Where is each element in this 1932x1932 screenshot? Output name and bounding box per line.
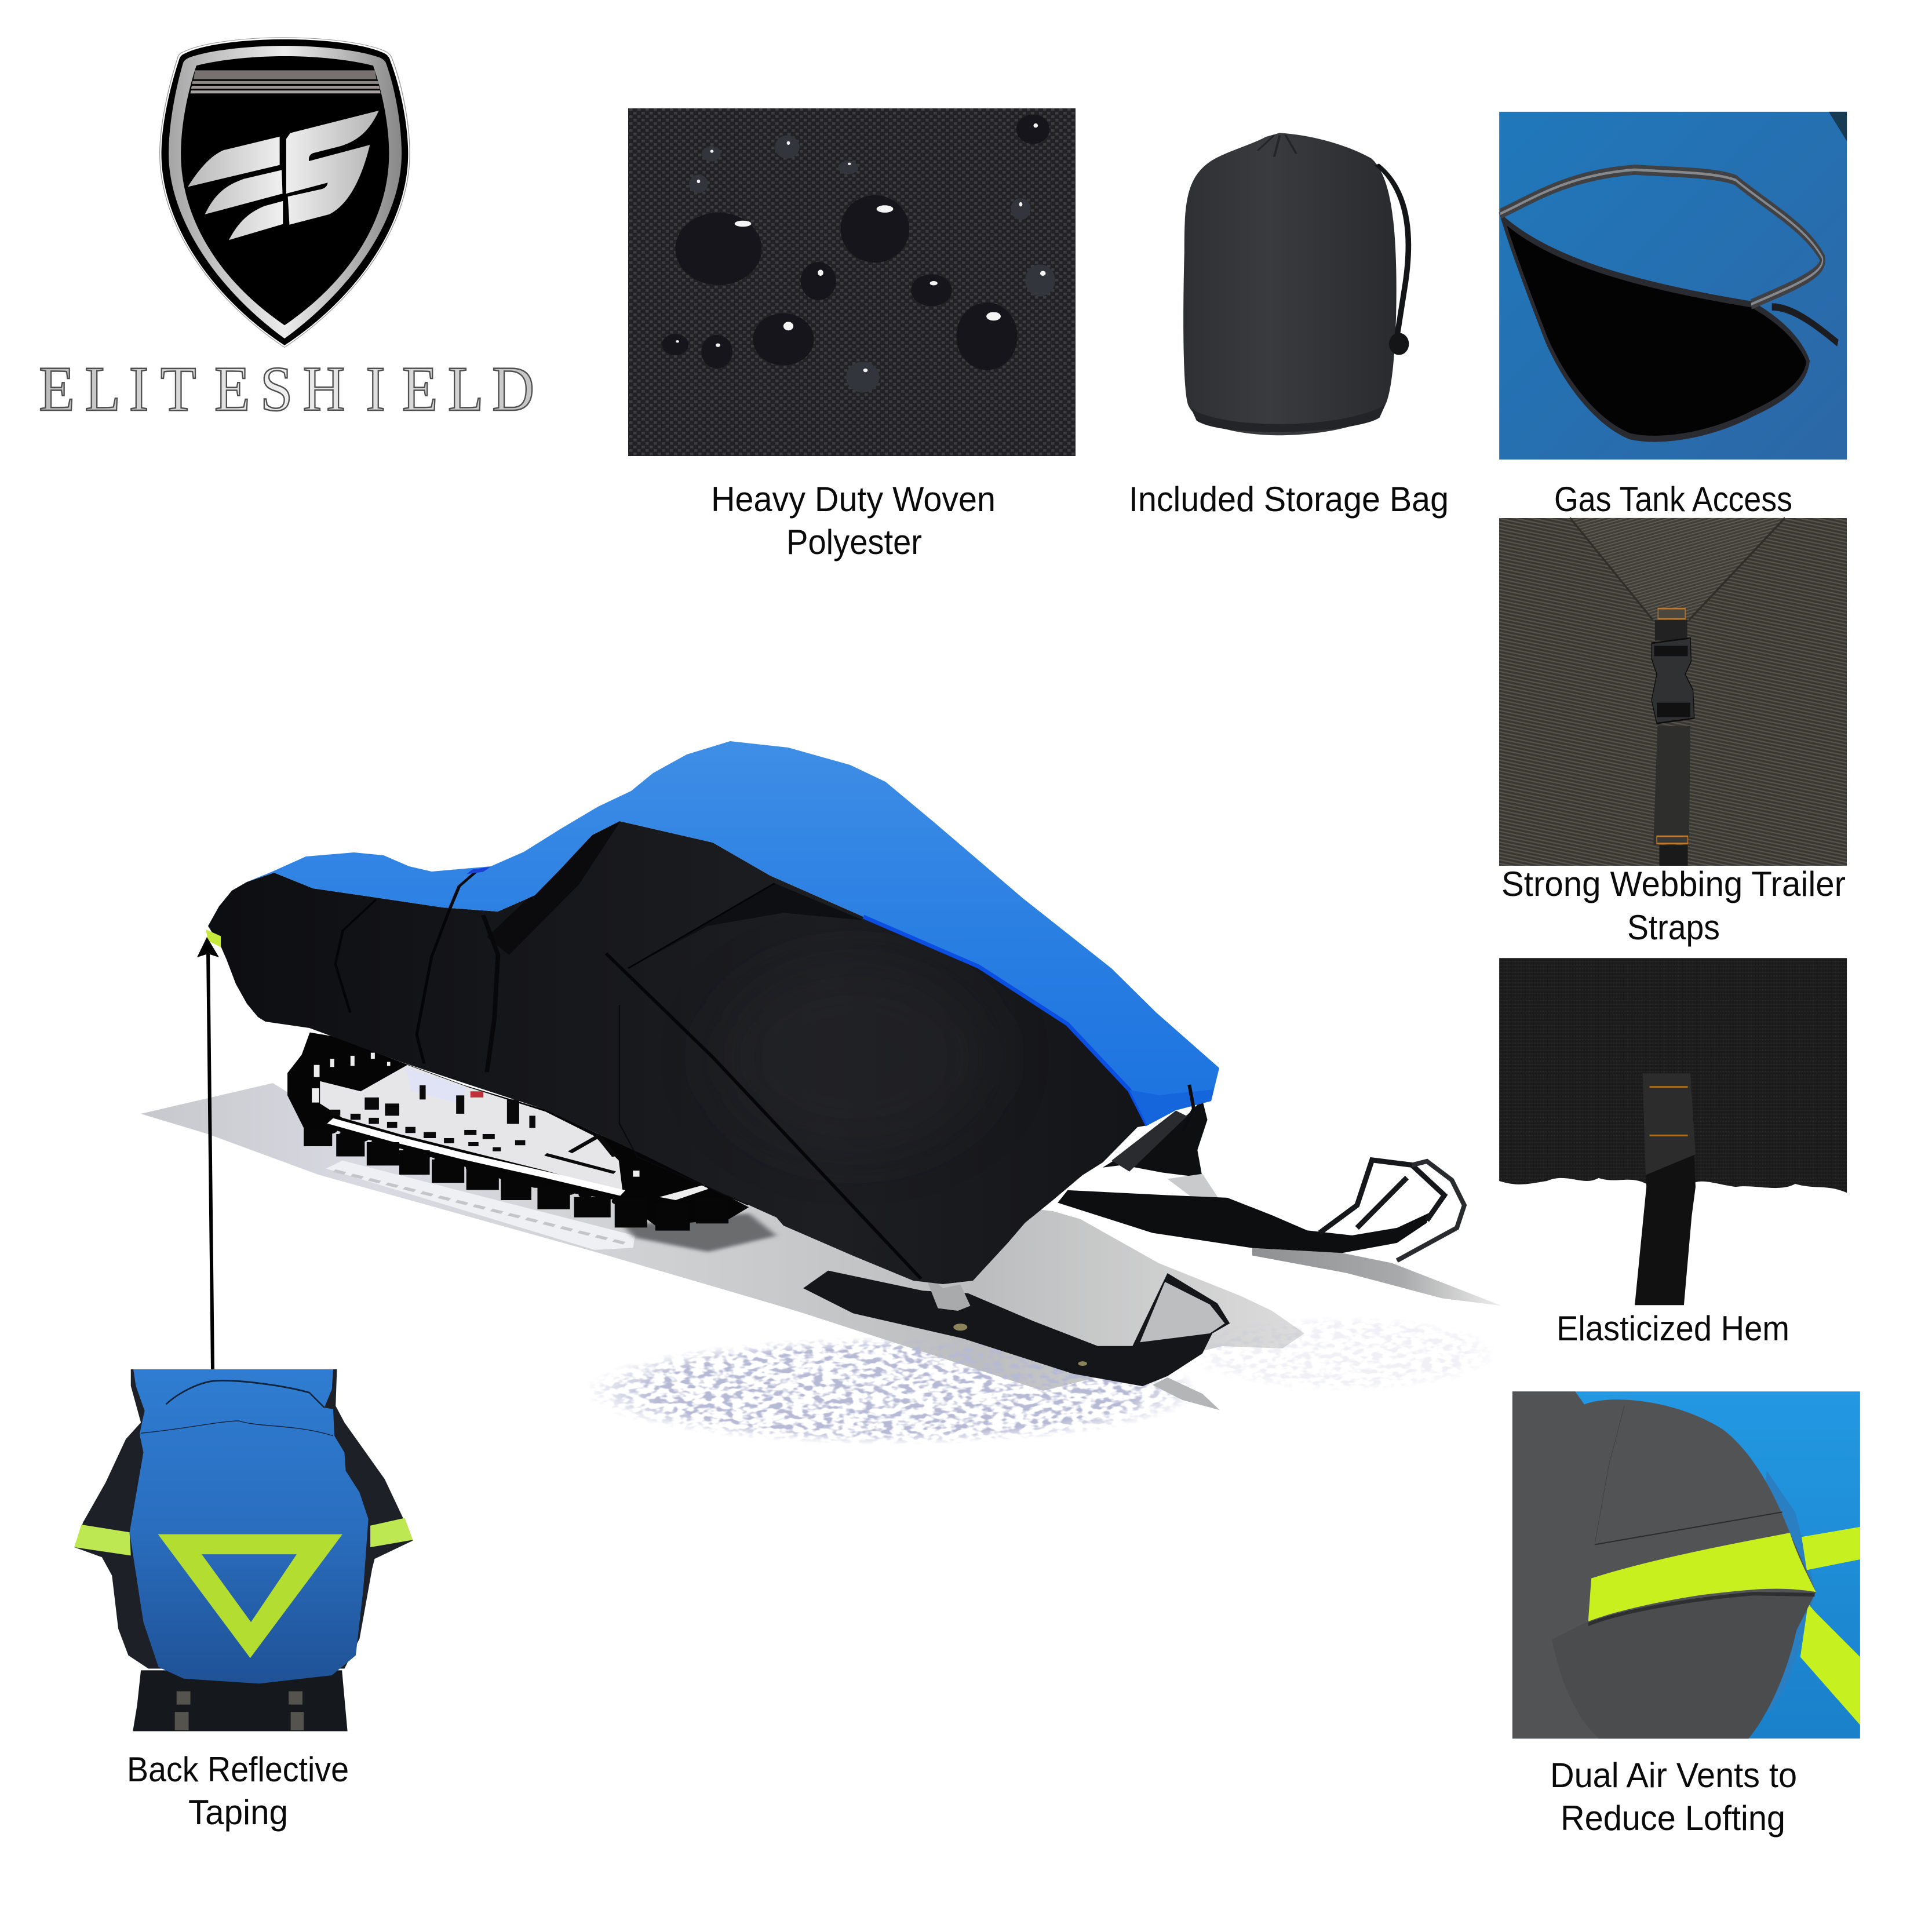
upper ski — [1058, 1190, 1430, 1253]
fabric swatch — [628, 108, 1076, 456]
caption: Included Storage Bag — [1129, 480, 1449, 519]
snow patch — [583, 1316, 1502, 1445]
zipper opening photo — [1499, 112, 1847, 460]
caption: Elasticized Hem — [1556, 1309, 1789, 1348]
brand logo — [39, 38, 534, 424]
cover black lower panel — [208, 821, 1187, 1284]
wordmark: ELITESHIELD — [39, 353, 534, 424]
caption: Straps — [1627, 908, 1720, 947]
suspension strut — [1103, 1100, 1208, 1178]
caption: Heavy Duty Woven — [711, 480, 996, 519]
panel: dual air vents — [1512, 1391, 1860, 1838]
panel: back reflective taping — [74, 1369, 413, 1832]
fabric swatch — [1499, 518, 1847, 866]
rear-side ski shadow — [1252, 1248, 1502, 1306]
storage bag illustration — [1183, 133, 1409, 435]
main illustration: covered snowmobile — [141, 741, 1502, 1445]
panel: included storage bag — [1129, 133, 1449, 519]
caption: Dual Air Vents to — [1550, 1756, 1797, 1795]
cover blue top panel — [247, 741, 1219, 1131]
panel: elasticized hem — [1499, 958, 1847, 1348]
caption — [127, 1750, 349, 1832]
caption — [1550, 1756, 1797, 1838]
rear view photo — [74, 1369, 413, 1731]
panel: heavy duty woven polyester — [628, 108, 1076, 562]
reflective tab — [206, 929, 221, 947]
hem photo — [1499, 958, 1847, 1305]
caption: Back Reflective — [127, 1750, 349, 1789]
panel: gas tank access — [1499, 112, 1847, 519]
lower ski — [803, 1271, 1230, 1386]
arrow to reflective taping — [197, 937, 219, 1370]
caption: Reduce Lofting — [1561, 1799, 1785, 1838]
caption: Polyester — [786, 523, 922, 562]
caption — [1501, 865, 1846, 947]
lower ski shadow — [1153, 1377, 1220, 1410]
vent photo — [1512, 1391, 1860, 1738]
strap and buckle — [1570, 518, 1785, 866]
snow ground plate — [141, 1083, 1501, 1391]
panel: strong webbing trailer straps — [1499, 518, 1847, 947]
shield emblem — [160, 38, 410, 347]
caption: Gas Tank Access — [1554, 480, 1792, 519]
front skis — [803, 1100, 1502, 1410]
caption — [711, 480, 996, 562]
water droplets — [662, 115, 1055, 392]
track and suspension — [287, 1033, 749, 1231]
caption: Strong Webbing Trailer — [1501, 865, 1846, 903]
caption: Taping — [188, 1793, 288, 1832]
